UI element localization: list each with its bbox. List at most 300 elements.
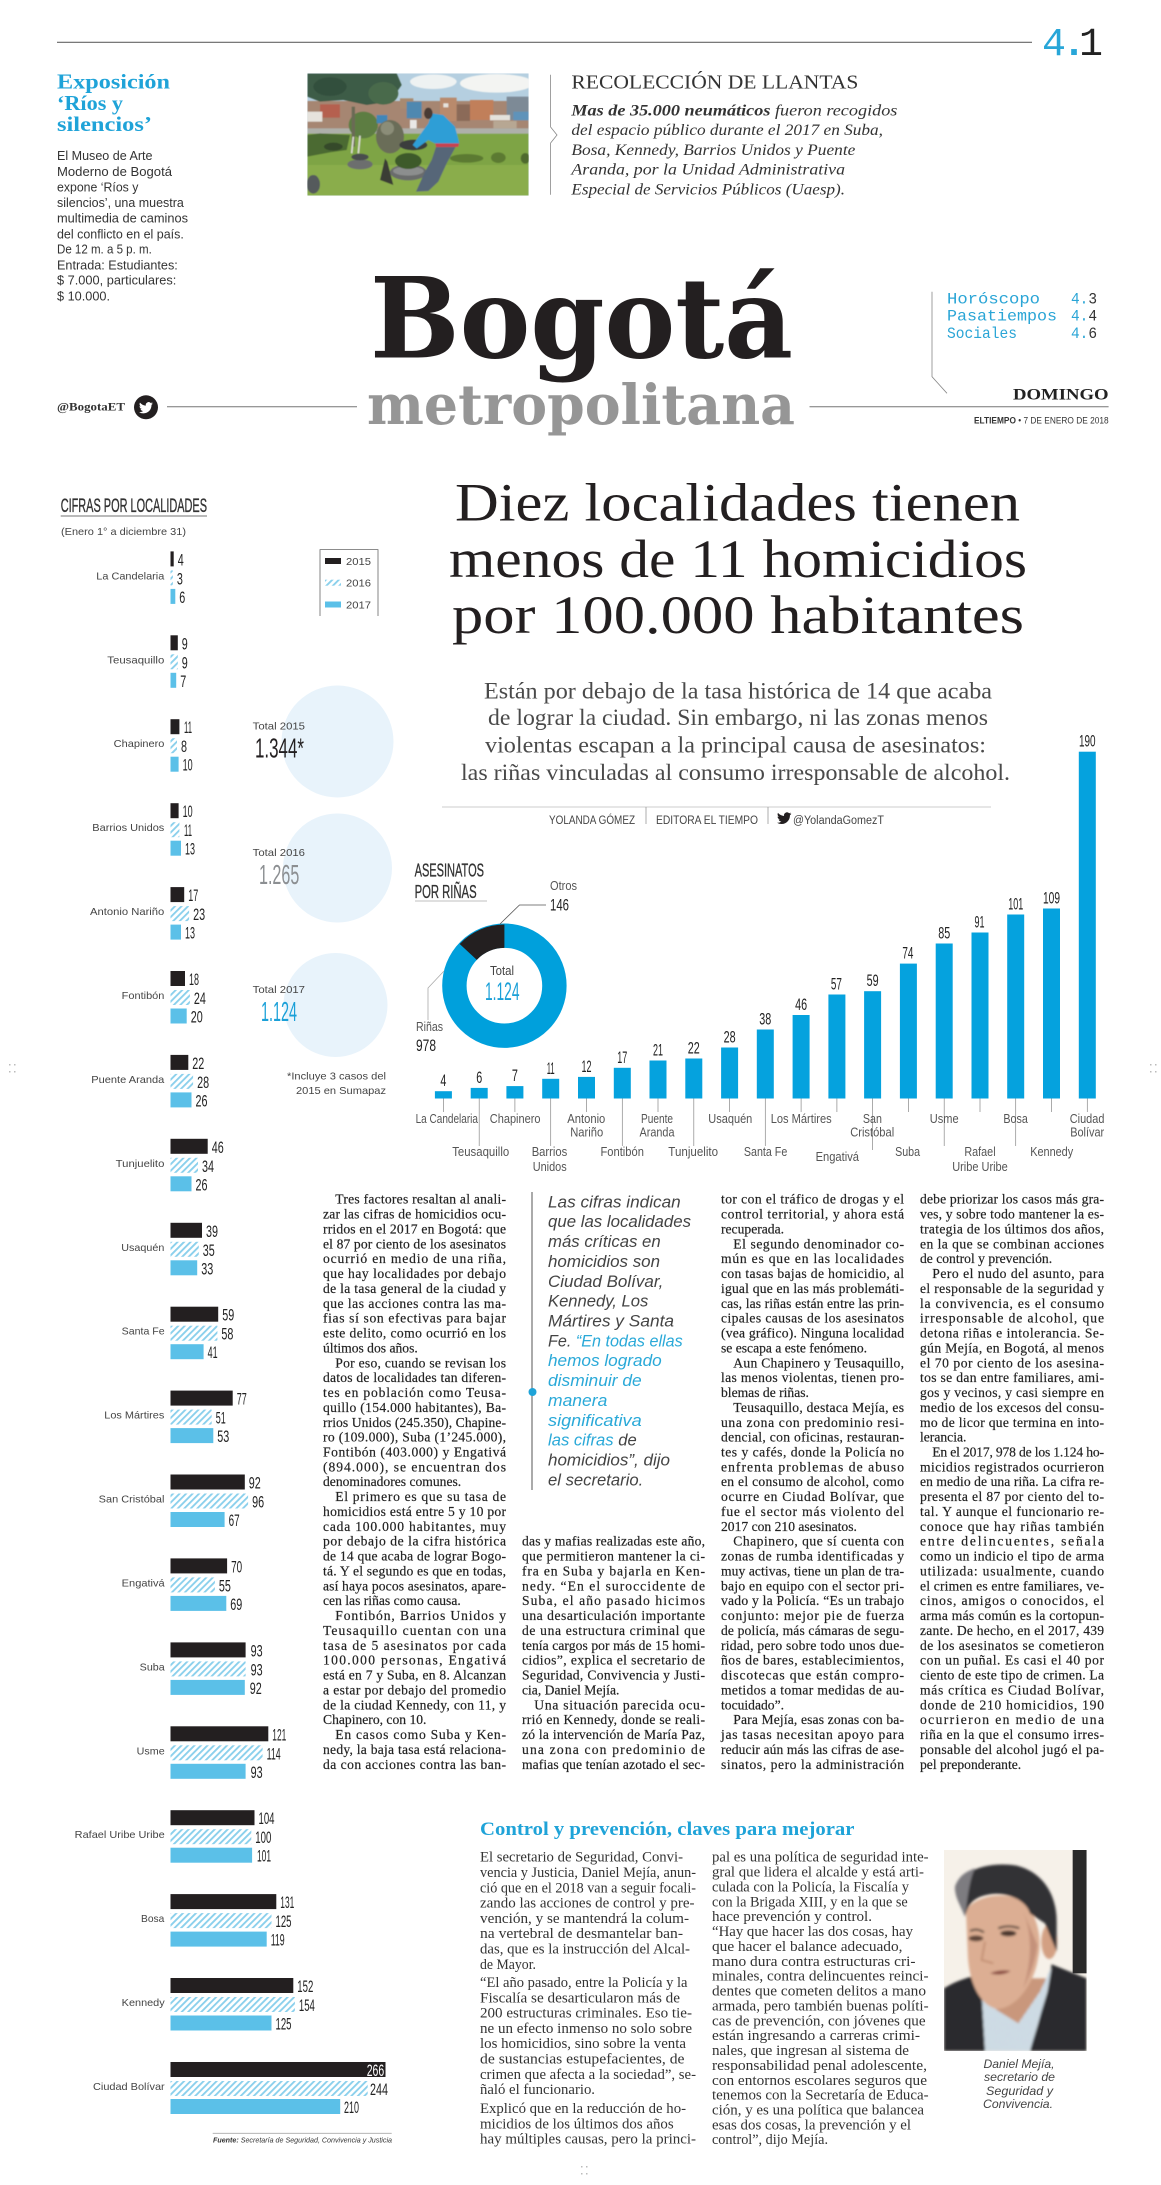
bar labels: Rafael — [964, 1145, 996, 1159]
deck: violentas escapan a la principal causa de asesinatos: — [485, 733, 986, 758]
text block: exposición: $ 7.000, particulares: — [57, 273, 176, 288]
article column 3: en el consumo de alcohol, como — [721, 1474, 904, 1489]
sidebar column 1: vencia y Justicia, Daniel Mejía, anun- — [480, 1865, 696, 1881]
article column 4: con un puñal. Es casi el 40 por — [920, 1653, 1104, 1668]
article column 2: nedy. “En el suroccidente de — [522, 1578, 705, 1593]
bar labels: Engativá — [816, 1150, 859, 1164]
bar group: Los Mártires: 51 — [216, 1409, 226, 1428]
article column 3: de policía, más cámaras de segu- — [721, 1623, 904, 1638]
article column 1: que las acciones contra las ma- — [323, 1296, 506, 1311]
leader lines — [443, 1098, 1087, 1150]
bar labels: Bolívar — [1070, 1126, 1104, 1140]
bar group: Suba: 93 — [251, 1641, 263, 1660]
deck — [461, 678, 1010, 785]
donut chart: Total — [490, 964, 514, 978]
bar group: Tunjuelito: 34 — [202, 1157, 214, 1176]
panel: cifras por localidades: 131 — [280, 1893, 294, 1912]
sidebar column 2: que hacer el balance adecuado, — [712, 1939, 902, 1955]
article column 1: rrios Unidos (245.350), Chapine- — [323, 1415, 506, 1431]
article column 1: está en 7 y Suba, en 8. Alcanzan — [323, 1668, 506, 1682]
article column 1: este delito, como ocurrió en los — [323, 1326, 506, 1340]
pull quote: homicidios son — [548, 1253, 660, 1271]
bar group: Suba: 93 — [251, 1660, 263, 1679]
article column 2: mafias que tenían azotado el sec- — [522, 1757, 705, 1772]
deck: Están por debajo de la tasa histórica de 14 que acaba — [484, 678, 992, 704]
pull quote: más críticas en — [548, 1233, 661, 1251]
article column 1: Tres factores resaltan al anali- — [335, 1192, 506, 1207]
article column 1: tes en población como Teusa- — [323, 1385, 506, 1400]
bar group: Santa Fe: Santa Fe — [122, 1326, 165, 1338]
bar group: San Cristóbal: 92 — [249, 1474, 261, 1492]
article column 3: 2017 con 210 asesinatos. — [721, 1519, 857, 1534]
article column 2: cidios”, explica el secretario de — [522, 1653, 705, 1668]
bar group: Kennedy: 152 — [297, 1977, 313, 1996]
text block: exposición: expone ‘Ríos y — [57, 179, 139, 194]
circles: totals: Total 2017 — [253, 984, 305, 996]
text block: exposición: multimedia de caminos — [57, 211, 188, 226]
sidebar column 1: micidios de los últimos dos años — [480, 2116, 674, 2132]
circles: totals: Total 2016 — [253, 847, 305, 859]
article column 4: zante. De hecho, en el 2017, 439 — [920, 1623, 1104, 1638]
sidebar column 1: na vertebral de desmantelar ban- — [480, 1926, 683, 1942]
article column 3: sinatos, pero la administración — [721, 1757, 904, 1772]
bar values — [440, 732, 1096, 1090]
article column 4: de control y prevención. — [920, 1251, 1052, 1266]
bar group: San Cristóbal: 67 — [229, 1511, 240, 1530]
article column 1: de la tasa general de la ciudad y — [323, 1281, 506, 1296]
heading: asesinatos por riñas — [415, 860, 487, 902]
pull quote: Kennedy, Los — [548, 1293, 648, 1311]
bar group: Suba — [140, 1641, 263, 1698]
bar group: Ciudad Bolívar: Ciudad Bolívar — [93, 2081, 165, 2093]
bar labels: Chapinero — [490, 1112, 541, 1126]
circles: totals: 1.344* — [255, 733, 304, 764]
circles: totals: 1.265 — [259, 859, 299, 890]
article column 4: donde de 210 homicidios, 190 — [920, 1697, 1104, 1712]
bar values: 57 — [831, 974, 842, 994]
sidebar column 1: ció que en el 2018 van a seguir focali- — [480, 1880, 696, 1896]
article column 4: de los asesinatos se cometieron — [920, 1638, 1104, 1653]
bar values: 109 — [1043, 888, 1060, 908]
bar group: Usaquén: 39 — [206, 1222, 218, 1241]
text block: recolección de llantas — [570, 102, 897, 198]
sidebar column 1: Explicó que en la reducción de ho- — [480, 2101, 686, 2117]
sidebar column 1: los homicidios, sino sobre la venta — [480, 2036, 687, 2052]
legend — [320, 550, 378, 616]
bar labels: Antonio — [567, 1112, 605, 1126]
article column 1: de la ciudad Kennedy, con 11, y — [323, 1697, 506, 1712]
article column 3: una zona con predominio resi- — [721, 1415, 904, 1430]
bar values: 11 — [547, 1059, 555, 1078]
bars — [435, 752, 1096, 1098]
article column 3: vado y la Policía. “Es un trabajo — [721, 1593, 904, 1608]
bar labels: Unidos — [533, 1160, 567, 1174]
bar group: Los Mártires: 53 — [217, 1427, 229, 1446]
article column 1: que hay localidades por debajo — [323, 1266, 506, 1281]
article column 3: Para Mejía, esas zonas con ba- — [733, 1712, 904, 1727]
bar group: Usme: 114 — [267, 1744, 281, 1763]
bar group: Usaquén — [121, 1222, 218, 1278]
sidebar column 1 — [480, 1850, 696, 2148]
bar labels: San — [863, 1112, 882, 1126]
article column 3: reducir aún más las cifras de ase- — [721, 1742, 904, 1757]
article column 1: Fontibón (403.000) y Engativá — [323, 1444, 506, 1460]
article column 1: nedy, la baja tasa está relaciona- — [323, 1742, 506, 1757]
bar group: Antonio Nariño: 13 — [185, 924, 195, 943]
bar group: Antonio Nariño: 17 — [188, 886, 198, 905]
article column 4: Pero el nudo del asunto, para — [932, 1266, 1104, 1281]
bar values: 28 — [724, 1028, 736, 1046]
article column 3: Chapinero, que sí cuenta con — [733, 1534, 904, 1549]
article column 1: ocurrió en medio de una riña, — [323, 1251, 506, 1266]
article column 3: cipales causas de los asesinatos — [721, 1311, 904, 1326]
bar group: Tunjuelito: 26 — [196, 1175, 208, 1194]
bar group: Ciudad Bolívar: 244 — [370, 2080, 388, 2099]
headline: Diez localidades tienen — [455, 472, 1020, 532]
article column 4: ciento de este tipo de crimen. La — [920, 1668, 1104, 1682]
text block: exposición: $ 10.000. — [57, 288, 110, 303]
callout: riñas: Riñas — [416, 1020, 443, 1034]
bar group: Teusaquillo: 9 — [182, 653, 188, 672]
page number — [1042, 23, 1103, 68]
heading: exposición: Exposición — [57, 69, 170, 93]
article column 3: recuperada. — [721, 1221, 784, 1236]
bar group: Santa Fe: 41 — [208, 1343, 218, 1362]
photo caption — [983, 2057, 1055, 2111]
pull quote: disminuir de — [548, 1372, 642, 1390]
photo: recolección de llantas — [307, 73, 533, 196]
bar values: 38 — [759, 1010, 771, 1028]
circles: totals — [253, 686, 394, 1057]
sidebar column 1: hay múltiples causas, pero la princi- — [480, 2132, 696, 2148]
sidebar column 1: ñaló el funcionario. — [480, 2082, 595, 2098]
bar group: San Cristóbal — [99, 1474, 264, 1530]
article column 1: por debajo de la cifra histórica — [323, 1534, 506, 1549]
donut chart: 1.124 — [485, 978, 520, 1006]
article column 3: fue el sector más violento del — [721, 1504, 904, 1519]
bar group: Fontibón: 20 — [191, 1008, 203, 1026]
article column 1: cada 100.000 habitantes, muy — [323, 1519, 506, 1534]
article column 4: mo de licor que termina en into- — [920, 1415, 1104, 1430]
bar group: Usme: 93 — [251, 1763, 263, 1782]
masthead: metropolitana: metropolitana — [367, 372, 795, 437]
article column 3 — [720, 1192, 904, 1772]
article column 2: tenía cargos por más de 15 homi- — [522, 1638, 705, 1653]
article column 2: Seguridad, Convivencia y Justi- — [522, 1668, 705, 1682]
pull quote: manera — [548, 1392, 607, 1410]
page number: 1 — [1079, 23, 1103, 68]
bar group: Rafael Uribe Uribe: Rafael Uribe Uribe — [75, 1829, 165, 1841]
bar group: Puente Aranda: 28 — [197, 1073, 209, 1092]
sidebar column 1: El secretario de Seguridad, Convi- — [480, 1850, 683, 1866]
bar group: Usaquén: Usaquén — [121, 1242, 164, 1254]
heading: asesinatos por riñas: ASESINATOS — [415, 860, 484, 880]
article column 1: últimos dos años. — [323, 1340, 418, 1355]
article column 3: Aun Chapinero y Teusaquillo, — [733, 1355, 904, 1370]
article column 4: medio de los excesos del consu- — [920, 1400, 1104, 1415]
bar values: 85 — [938, 924, 950, 942]
text block: exposición: El Museo de Arte — [57, 148, 152, 163]
panel: cifras por localidades: 11 — [184, 718, 192, 737]
sidebar column 2: responsabilidad penal adolescente, — [712, 2058, 927, 2074]
bar values: 74 — [902, 944, 913, 963]
article column 1: tá. Y el segundo es que en todas, — [323, 1564, 506, 1578]
bar values: 22 — [688, 1038, 700, 1058]
pull quote: homicidios”, dijo — [548, 1452, 670, 1470]
callout: riñas — [416, 971, 444, 1055]
legend: 2015 — [346, 556, 371, 568]
article column 1: cen las riñas como causa. — [323, 1593, 461, 1608]
pull quote: Ciudad Bolívar, — [548, 1273, 663, 1291]
sidebar column 1: “El año pasado, entre la Policía y la — [480, 1975, 688, 1991]
photo caption: Convivencia. — [983, 2097, 1053, 2111]
article column 2: das y mafias realizadas este año, — [522, 1534, 705, 1549]
article column 3: se escapa a este fenómeno. — [721, 1340, 867, 1355]
source note: Fuente: Secretaría de Seguridad, Convivencia y Justicia — [213, 2136, 392, 2145]
article column 4: En el 2017, 978 de los 1.124 ho- — [932, 1444, 1104, 1460]
article column 1: así haya pocos asesinatos, apare- — [323, 1578, 506, 1593]
article column 3: las menos violentas, tienen pro- — [721, 1370, 904, 1385]
panel: section index: Sociales — [947, 325, 1017, 343]
panel: cifras por localidades: 121 — [272, 1725, 286, 1744]
article column 1: datos de localidades tan diferen- — [323, 1370, 506, 1385]
article column 4: en medio de una riña. La cifra re- — [920, 1474, 1104, 1489]
article column 4: ves, y sobre todo mantener la es- — [920, 1207, 1104, 1222]
bar group: Barrios Unidos: 11 — [184, 821, 192, 840]
sidebar column 2: gral que lidera el alcalde y está arti- — [712, 1865, 924, 1881]
sidebar column 2: esas dos cosas, la prevención y el — [712, 2117, 911, 2133]
bar group: Usaquén: 33 — [201, 1259, 213, 1278]
heading: exposición: silencios’ — [57, 112, 152, 136]
social handle: @BogotaET — [57, 400, 125, 414]
panel: recolección de llantas — [551, 69, 897, 198]
bar labels: Kennedy — [1030, 1145, 1074, 1159]
bar group: Fontibón: Fontibón — [122, 990, 165, 1002]
bar group: Chapinero: 10 — [183, 756, 193, 775]
sidebar column 2: culada con la Policía, la Fiscalía y — [712, 1879, 910, 1895]
article column 3: ridad, pero sobre todo unos due- — [721, 1638, 904, 1653]
legend: 2016 — [346, 578, 371, 590]
article column 2 — [522, 1534, 705, 1772]
bar values: 17 — [617, 1048, 627, 1067]
pull quote: hemos logrado — [548, 1352, 662, 1370]
pull quote: Mártires y Santa — [548, 1312, 674, 1330]
article column 4: ocurrieron en medio de una — [920, 1712, 1104, 1727]
text block: exposición: silencios’, una muestra — [57, 195, 185, 210]
article column 3: discotecas que están compro- — [721, 1668, 904, 1682]
panel: section index — [932, 290, 1097, 393]
text block: recolección de llantas: Especial de Servicios Públicos (Uaesp). — [570, 181, 845, 198]
footnote: 2015 en Sumapaz — [296, 1085, 386, 1097]
bar group: Los Mártires — [104, 1390, 247, 1446]
subheading: fechas: (Enero 1° a diciembre 31) — [61, 526, 186, 538]
article column 4: utilizada: usualmente, cuando — [920, 1564, 1104, 1578]
article column 3: jas tasas necesitan apoyo para — [720, 1727, 904, 1742]
article column 2: zó la intervención de María Paz, — [522, 1727, 705, 1742]
bar group: Chapinero — [114, 718, 193, 775]
bar group: Fontibón: 18 — [189, 970, 199, 989]
callout: otros — [500, 879, 577, 924]
article column 4: pel preponderante. — [920, 1757, 1021, 1772]
panel: section index: Horóscopo — [947, 290, 1040, 308]
bar labels: Cristóbal — [850, 1126, 894, 1140]
bar group: Kennedy: 125 — [276, 2014, 292, 2034]
heading: recolección de llantas: RECOLECCIÓN DE LLANTAS — [571, 69, 858, 93]
bar group: La Candelaria: La Candelaria — [96, 570, 164, 582]
article column 3: tocuidado”. — [721, 1697, 784, 1712]
sidebar column 2: mano dura contra estructuras cri- — [712, 1954, 916, 1970]
article column 1: ro (109.000), Suba (1’245.000), — [323, 1430, 506, 1446]
bar group: Kennedy: Kennedy — [122, 1997, 165, 2009]
text block: recolección de llantas: Mas de 35.000 neumáticos fueron recogidos — [570, 102, 897, 119]
bar group: Chapinero: 8 — [181, 737, 187, 756]
bar group: San Cristóbal: 96 — [252, 1492, 264, 1512]
text block: exposición: del conflicto en el país. — [57, 226, 184, 241]
article column 3: ños de bares, establecimientos, — [721, 1653, 904, 1668]
divider with chevron — [551, 75, 557, 195]
text block: recolección de llantas: del espacio público durante el 2017 en Suba, — [571, 122, 883, 139]
bar group: Antonio Nariño: Antonio Nariño — [90, 906, 164, 918]
sidebar column 2: con entornos escolares seguros que — [712, 2073, 927, 2089]
bar labels: Tunjuelito — [668, 1145, 718, 1159]
sidebar column 1: 200 estructuras criminales. Eso tie- — [480, 2006, 692, 2022]
article column 4: gún Mejía, en Bogotá, al menos — [920, 1340, 1104, 1355]
heading: exposición: ‘Ríos y — [57, 91, 124, 115]
bar labels: Nariño — [570, 1126, 603, 1140]
headline — [449, 472, 1027, 645]
sidebar column 1: de sustancias estupefacientes, de — [480, 2052, 684, 2068]
sidebar column 2: tenemos con la Secretaría de Educa- — [712, 2088, 929, 2104]
article column 4: en la que se combinan acciones — [920, 1236, 1104, 1251]
heading: cifras por localidades: CIFRAS POR LOCALIDADES — [61, 496, 207, 517]
bar group: Rafael Uribe Uribe: 101 — [257, 1847, 271, 1866]
callout: riñas: 978 — [416, 1036, 436, 1055]
callout: otros: Otros — [550, 879, 577, 893]
sidebar column 2: “Hay que hacer las dos cosas, hay — [712, 1924, 914, 1940]
article column 4: debe priorizar los casos más gra- — [920, 1192, 1104, 1207]
bar group: Tunjuelito — [116, 1138, 224, 1194]
photo caption: Daniel Mejía, — [984, 2057, 1054, 2071]
article column 1: fias sí son efectivas para bajar — [323, 1311, 506, 1326]
article column 1: de 14 que acaba de lograr Bogo- — [323, 1549, 506, 1564]
sidebar column 1: ne un efecto inmenso no solo sobre — [480, 2021, 692, 2037]
bar group: Barrios Unidos: 10 — [183, 802, 193, 821]
article column 3: enfrenta problemas de abuso — [721, 1459, 904, 1474]
bar group: Puente Aranda — [91, 1054, 209, 1110]
text block: recolección de llantas: Aranda, por la Unidad Administrativa — [570, 161, 845, 178]
bar values: 101 — [1008, 894, 1023, 914]
pull quote — [528, 1192, 691, 1490]
pull quote: significativa — [548, 1412, 642, 1430]
bar group: Ciudad Bolívar: 266 — [367, 2061, 384, 2080]
bar labels — [416, 1112, 1104, 1174]
bar group: Antonio Nariño — [90, 886, 205, 943]
bar group: Fontibón: 24 — [194, 989, 206, 1008]
panel: asesinatos por riñas — [415, 860, 577, 1055]
article column 4: más crítica es Ciudad Bolívar, — [920, 1682, 1104, 1697]
bar values: 6 — [476, 1068, 482, 1087]
deck: de lograr la ciudad. Sin embargo, ni las zonas menos — [488, 705, 988, 730]
footnote — [287, 1070, 386, 1097]
heading: asesinatos por riñas: POR RIÑAS — [415, 881, 477, 902]
bar group: Santa Fe: 58 — [221, 1325, 233, 1344]
callout: otros: 146 — [550, 896, 569, 914]
byline — [442, 807, 991, 827]
article column 3: ocurre en Ciudad Bolívar, que — [721, 1489, 904, 1504]
footnote: *Incluye 3 casos del — [287, 1070, 386, 1082]
panel: section index: 4.6 — [1071, 325, 1097, 343]
bar group: Engativá: 55 — [219, 1576, 231, 1595]
bar group: Suba: Suba — [140, 1661, 165, 1673]
article column 2: de una estructura criminal que — [522, 1623, 705, 1638]
photo caption: Seguridad y — [986, 2084, 1054, 2098]
page number: . — [1062, 23, 1086, 68]
sidebar column 2 — [712, 1850, 929, 2148]
byline: @YolandaGomezT — [793, 815, 884, 827]
bar labels: Bosa — [1003, 1112, 1028, 1126]
sidebar column 1: crimen que afecta a la sociedad”, se- — [480, 2067, 696, 2083]
bar labels: Usme — [930, 1112, 959, 1126]
pull quote: Las cifras indican — [548, 1193, 681, 1211]
sidebar column 2: ción, y es una política que balancea — [712, 2102, 925, 2118]
bar group: Bosa: Bosa — [141, 1913, 164, 1925]
sidebar column 1: das, que es la instrucción del Alcal- — [480, 1942, 690, 1958]
dateline: DOMINGO — [1013, 386, 1109, 403]
article column 2: rrió en Kennedy, donde se reali- — [522, 1712, 705, 1727]
headline: menos de 11 homicidios — [449, 529, 1027, 589]
bar group: Puente Aranda: Puente Aranda — [91, 1074, 164, 1086]
bar labels: Los Mártires — [771, 1112, 832, 1126]
pull quote: el secretario. — [548, 1471, 643, 1489]
bar group: Kennedy — [122, 1977, 315, 2034]
article column 4: entre delincuentes, señala — [920, 1534, 1104, 1549]
bar group: Teusaquillo: 7 — [180, 672, 186, 691]
dateline: ELTIEMPO • 7 DE ENERO DE 2018 — [974, 415, 1109, 426]
sidebar column 1: zando las acciones de control y pre- — [480, 1896, 695, 1912]
bar group: Antonio Nariño: 23 — [193, 905, 205, 924]
article column 4: riña en la que el consumo irres- — [920, 1727, 1104, 1742]
bar labels: Teusaquillo — [452, 1145, 509, 1159]
article column 1: Chapinero, con 10. — [323, 1712, 426, 1727]
deck: las riñas vinculadas al consumo irresponsable de alcohol. — [461, 760, 1010, 785]
bar labels: La Candelaria — [416, 1112, 478, 1126]
article column 2: cia, Daniel Mejía. — [522, 1682, 619, 1697]
bar group: Engativá — [122, 1557, 242, 1614]
bar group: Suba: 92 — [250, 1679, 262, 1698]
bar group: Ciudad Bolívar — [93, 2061, 388, 2117]
bar group: Usme — [137, 1725, 286, 1782]
panel: section index: Pasatiempos — [947, 307, 1057, 325]
article column 3: muy activas, tiene un plan de tra- — [721, 1564, 904, 1578]
article column 2: fra en Suba y bajarla en Ken- — [522, 1564, 705, 1578]
bar group: Rafael Uribe Uribe: 104 — [258, 1809, 274, 1828]
article column 4: como un indicio el tipo de arma — [920, 1549, 1104, 1564]
article column 1: 100.000 personas, Engativá — [323, 1653, 506, 1668]
article column 1: Teusaquillo cuentan con una — [323, 1623, 506, 1638]
bar labels: Santa Fe — [744, 1145, 787, 1159]
bar group: Usaquén: 35 — [203, 1241, 215, 1260]
article column 2: una zona con predominio de — [522, 1742, 705, 1757]
article column 4: presenta el 87 por ciento del to- — [920, 1489, 1104, 1504]
article column 4: el 70 por ciento de los asesina- — [920, 1355, 1104, 1370]
bar group: La Candelaria: 4 — [178, 550, 184, 569]
article column 4: gos y vecinos, y casi siempre en — [920, 1385, 1104, 1400]
pull quote: las cifras de — [548, 1432, 637, 1450]
article column 1: zar las cifras de homicidios ocu- — [323, 1207, 506, 1222]
article column 1: quillo (154.000 habitantes), Ba- — [323, 1400, 506, 1416]
bar group: Bosa: 125 — [276, 1912, 292, 1931]
article column 1 — [323, 1192, 506, 1772]
